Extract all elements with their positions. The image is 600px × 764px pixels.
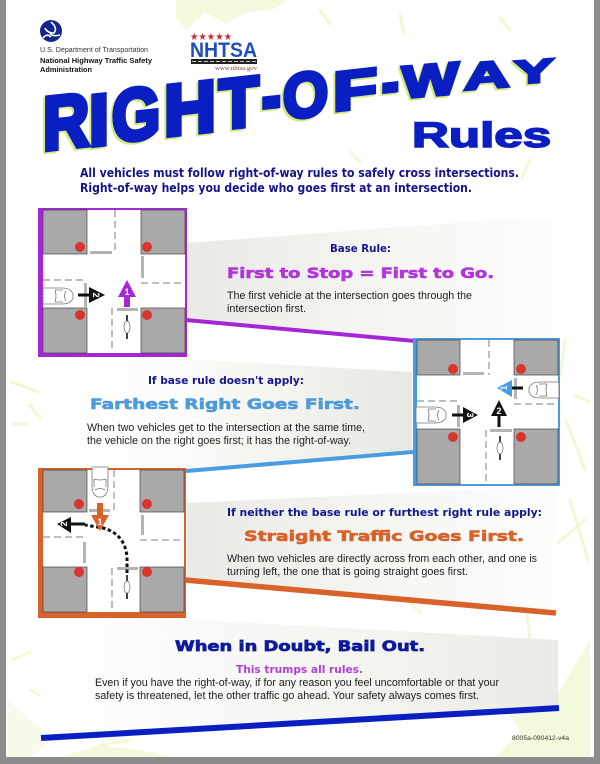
title: Right-of-Way: Y	[514, 52, 554, 91]
NHTSA logo: NHTSA	[190, 39, 257, 62]
title: Right-of-Way: T	[219, 63, 259, 145]
title: Right-of-Way: W	[402, 53, 460, 108]
panel: bail out background	[40, 618, 558, 738]
text: base rule: Base Rule:	[330, 243, 391, 255]
arrow: vehicle 2	[491, 400, 507, 427]
text: straight traffic rule: If neither the base rule or furthest right rule apply:	[227, 507, 542, 519]
title: Right-of-Way: O	[283, 57, 328, 132]
arrow: straight vehicle 1	[91, 503, 109, 531]
text: when in doubt: safety is threatened, let the other traffic go ahead. Your safety always comes first.	[95, 690, 479, 702]
text: base rule: The first vehicle at the intersection goes through the	[227, 290, 472, 302]
text: straight traffic rule: Straight Traffic Goes First.	[244, 529, 524, 545]
text: farthest right rule: Farthest Right Goes First.	[90, 397, 360, 413]
text: when in doubt	[95, 639, 499, 702]
diagram: straight traffic intersection	[38, 467, 186, 617]
text: farthest right rule: If base rule doesn't apply:	[148, 375, 304, 387]
arrow: vehicle 2: 2	[91, 292, 101, 298]
arrow: vehicle 2: 2	[496, 406, 502, 416]
arrow: vehicle 3: 3	[465, 412, 475, 418]
panel: straight traffic background	[187, 486, 560, 613]
title: Right-of-Way: R	[43, 77, 89, 166]
text: farthest right rule: the vehicle on the right goes first; it has the right-of-way.	[87, 435, 351, 447]
DOT logo: U.S. Department of Transportation	[40, 47, 148, 54]
text: when in doubt: When in Doubt, Bail Out.	[175, 639, 425, 655]
connector: blue footer bar	[41, 708, 559, 738]
panel: farthest right background	[40, 354, 412, 482]
intro text	[80, 166, 519, 195]
arrow: vehicle 1: 1	[124, 287, 130, 297]
text: farthest right rule: When two vehicles get to the intersection at the same time,	[87, 422, 365, 434]
text: when in doubt: This trumps all rules.	[236, 663, 363, 676]
title: Right-of-Way: F	[333, 57, 377, 123]
text: farthest right rule	[87, 375, 365, 447]
text: straight traffic rule	[227, 507, 542, 578]
intro text: Right-of-way helps you decide who goes first at an intersection.	[80, 181, 472, 195]
connector: blue line	[186, 452, 413, 471]
arrow: left turn path: 2	[59, 521, 69, 527]
DOT logo: Administration	[40, 67, 92, 74]
text: straight traffic rule: When two vehicles are directly across from each other, and one is	[227, 553, 537, 565]
title: Right-of-Way: G	[112, 72, 160, 158]
diagram: farthest right intersection	[413, 338, 559, 486]
text: base rule: First to Stop = First to Go.	[227, 266, 494, 282]
text: base rule: intersection first.	[227, 303, 306, 315]
arrow: vehicle 1	[118, 280, 136, 307]
arrow: vehicle 1: 1	[499, 385, 509, 391]
arrow: vehicle 1	[497, 380, 523, 397]
title: Right-of-Way	[43, 48, 554, 166]
title: Rules: Rules	[412, 116, 551, 155]
NHTSA logo	[190, 32, 257, 72]
title: Right-of-Way: -	[382, 48, 399, 117]
DOT logo	[40, 20, 152, 74]
text: when in doubt: Even if you have the right-of-way, if for any reason you feel uncomfortable or that your	[95, 677, 499, 689]
panel: base rule background	[187, 218, 560, 340]
NHTSA logo: ★★★★★	[190, 32, 232, 43]
title: Right-of-Way: A	[464, 53, 509, 99]
publication code: 8005a-090412-v4a	[512, 736, 570, 742]
NHTSA logo: www.nhtsa.gov	[215, 66, 257, 72]
arrow: vehicle 3	[452, 407, 478, 423]
intro text: All vehicles must follow right-of-way rules to safely cross intersections.	[80, 166, 519, 180]
arrow: left turn path	[57, 517, 127, 573]
text: straight traffic rule: turning left, the one that is going straight goes first.	[227, 566, 468, 578]
arrow: straight vehicle 1: 1	[97, 517, 103, 527]
connector: orange line	[185, 580, 556, 613]
connector: purple line	[186, 320, 415, 341]
title: Right-of-Way: -	[262, 54, 281, 138]
DOT logo: National Highway Traffic Safety	[40, 58, 152, 65]
arrow: vehicle 2	[78, 287, 105, 303]
title: Right-of-Way: I	[89, 80, 109, 162]
title: Right-of-Way: H	[164, 66, 216, 152]
text: base rule	[227, 243, 494, 315]
diagram: base rule intersection	[38, 208, 187, 357]
